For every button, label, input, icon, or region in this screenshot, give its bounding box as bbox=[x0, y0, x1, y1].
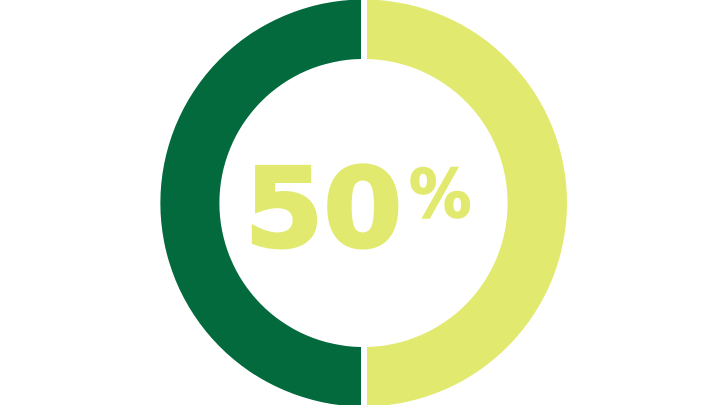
ring segment: dark green half bbox=[160, 0, 361, 405]
ring segment: light green half bbox=[367, 0, 567, 405]
center value: percent sign: % bbox=[409, 156, 471, 234]
center value: 50: 50 bbox=[245, 145, 402, 273]
